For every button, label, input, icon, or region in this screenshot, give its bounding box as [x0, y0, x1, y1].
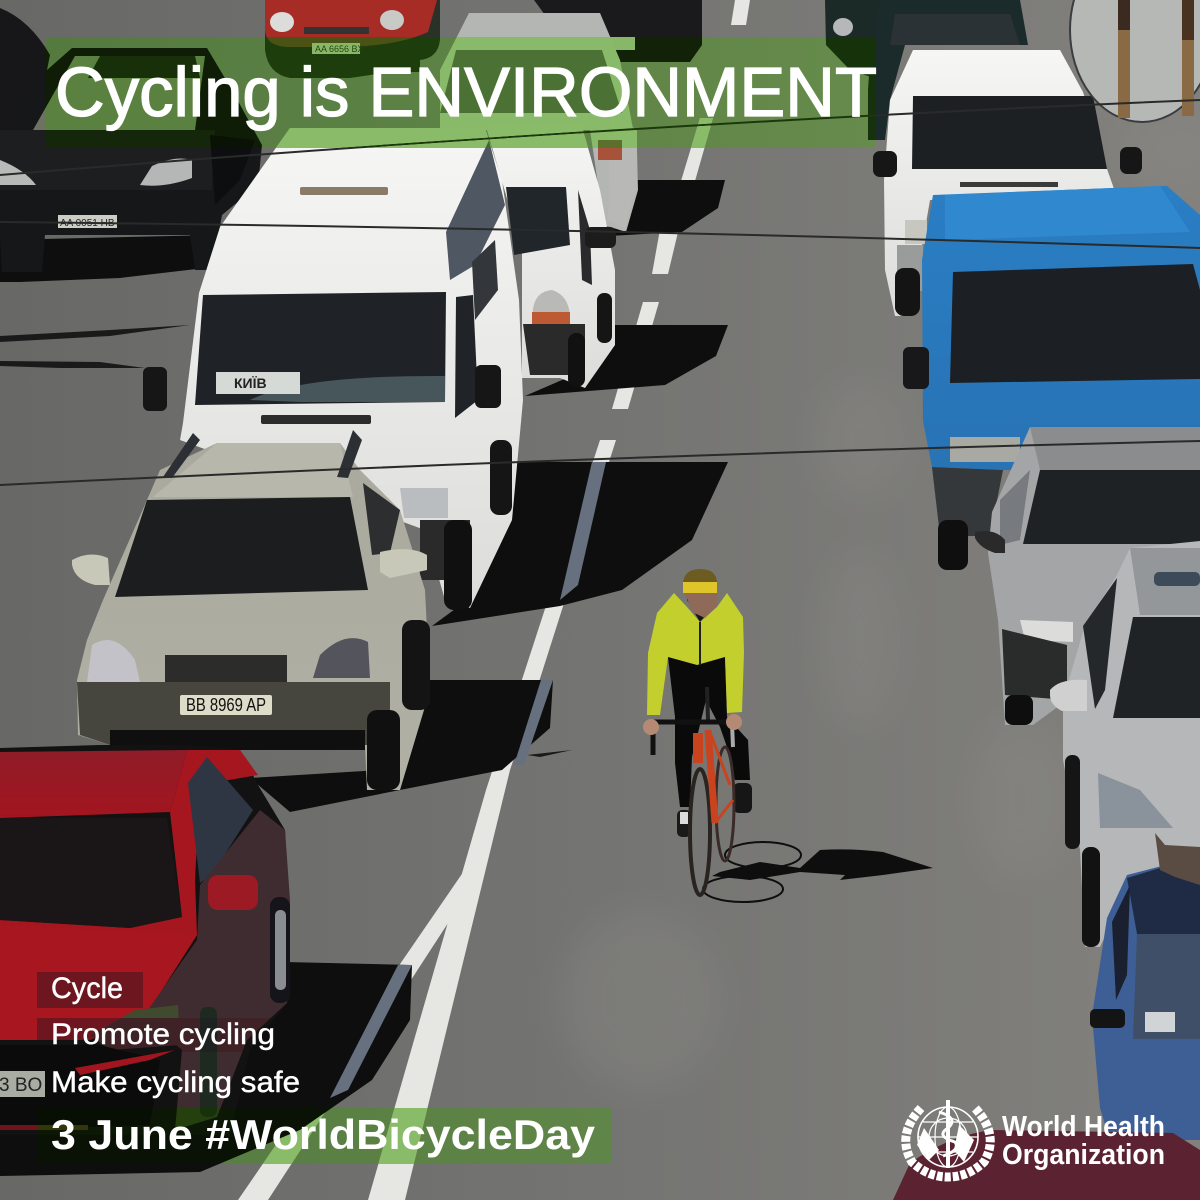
car: maroon car bottom right	[893, 1130, 1200, 1200]
shoes	[733, 783, 752, 813]
rear wheel	[716, 747, 734, 861]
call to action: Make cycling safe: Make cycling safe	[51, 1066, 300, 1099]
call to action: Promote cycling: Promote cycling	[51, 1018, 275, 1051]
car: dark cars top right	[825, 0, 1028, 140]
cap	[683, 569, 717, 582]
car: silver car right	[975, 427, 1200, 725]
mirror circle top right	[1070, 0, 1200, 122]
lane line seen through shadows	[330, 462, 606, 1098]
front wheel	[690, 769, 710, 895]
cyclist shadow	[703, 842, 933, 902]
car: black Porsche: AA 0051 HB	[60, 218, 115, 229]
call to action: Cycle: Cycle	[51, 972, 123, 1005]
call to action: Cycle	[37, 972, 143, 1008]
date and hashtag band	[37, 1108, 612, 1164]
car: silver Lexus right	[1050, 541, 1200, 947]
legs	[668, 657, 750, 807]
road: pale worn patches	[560, 110, 1200, 1090]
collar and face	[687, 590, 717, 622]
car: blue van right	[903, 186, 1200, 570]
car: silver Hyundai: BB 8969 AP	[186, 695, 266, 715]
car: red Ford at top	[265, 0, 440, 78]
car: dark car top-left corner	[0, 8, 50, 140]
car: red Ford at top: AA 6656 BX	[315, 44, 364, 54]
car: red car bottom left: 3 BO	[0, 1075, 42, 1096]
bike frame	[698, 730, 733, 823]
jacket	[647, 593, 744, 715]
hands	[643, 719, 659, 735]
car: dark car at top	[534, 0, 702, 62]
date and hashtag: 3 June #WorldBicycleDay	[51, 1111, 596, 1158]
car: silver car behind white van	[440, 13, 638, 232]
car: white van right	[873, 50, 1142, 316]
WHO logo wordmark: World Health	[1002, 1111, 1165, 1143]
title band	[45, 37, 875, 148]
WHO logo emblem	[906, 1100, 990, 1177]
car: large white van: КИЇВ	[234, 375, 267, 391]
title: Cycling is ENVIRONMENT	[55, 53, 877, 131]
car: black Porsche	[0, 48, 262, 272]
car shadows on road	[0, 180, 728, 1176]
overhead wires	[0, 100, 1200, 485]
car: small white van	[485, 123, 616, 388]
car: large white van	[143, 128, 523, 610]
car: silver Hyundai	[72, 430, 430, 790]
WHO logo wordmark	[1002, 1111, 1165, 1171]
car: blue car right	[1090, 833, 1200, 1140]
cyclist	[643, 569, 752, 895]
lane markings	[238, 0, 750, 1200]
road: thin cast shadows	[0, 325, 572, 757]
car: red car bottom left	[0, 745, 290, 1135]
WHO logo wordmark: Organization	[1002, 1139, 1165, 1171]
